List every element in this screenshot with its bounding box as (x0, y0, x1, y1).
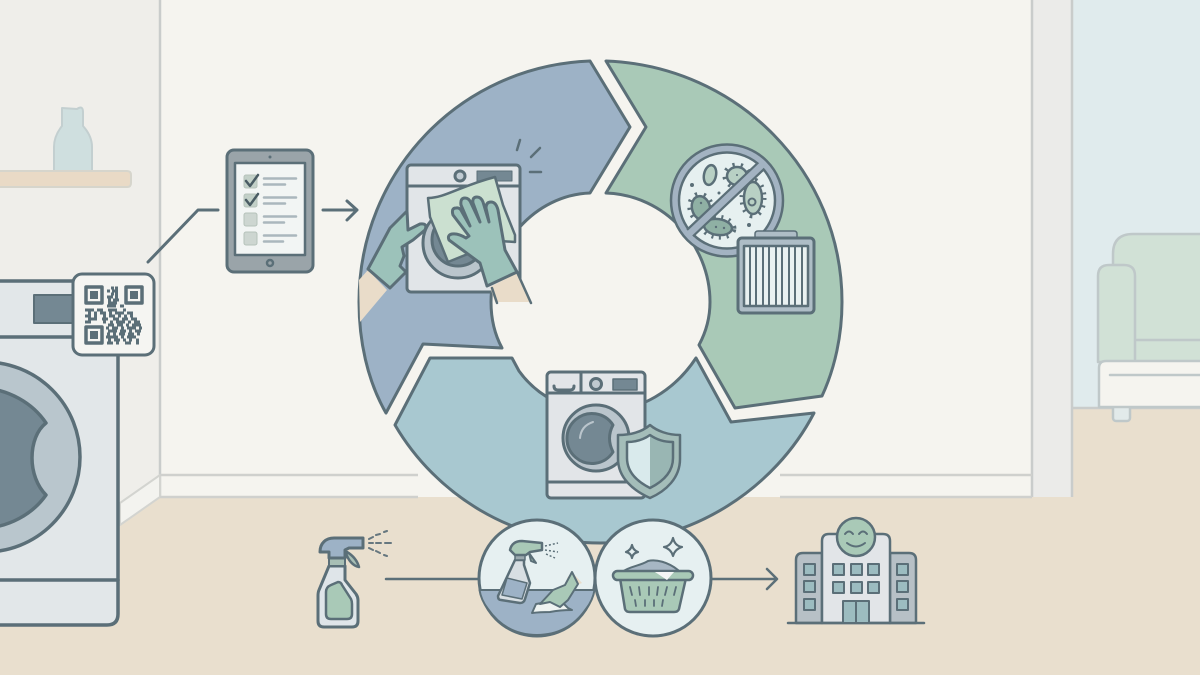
petri dish prohibition (671, 144, 783, 256)
washing machine with door (0, 281, 118, 625)
protected washer (547, 372, 645, 498)
mini spray bottle (498, 560, 530, 603)
tablet with checklist (227, 150, 313, 272)
left glove (368, 211, 426, 288)
sofa by the window (1098, 234, 1200, 421)
cloth under hand (532, 600, 572, 613)
arrow to hospital (711, 569, 777, 589)
cycle ring: segment blue, cleaning (359, 61, 630, 413)
tan left forearm (359, 270, 387, 322)
icon: spray bottle (318, 531, 391, 627)
circle: wiping surfaces (479, 520, 595, 636)
connector line from QR to tablet (148, 210, 218, 262)
bacteria spikes (689, 167, 762, 237)
gloved hand (540, 572, 578, 607)
arrow to cycle (323, 201, 357, 220)
bacteria bodies (689, 164, 762, 237)
icon: hospital building with smile (788, 518, 924, 623)
cycle ring: segment teal, protection (395, 358, 814, 543)
prohibition bar (690, 166, 761, 233)
cycle ring: segment green, filter (606, 61, 842, 408)
shelf with bottle (0, 108, 131, 187)
tan right forearm (490, 273, 531, 302)
shield (618, 425, 680, 498)
right glove (448, 197, 517, 286)
washer being wiped (407, 165, 520, 292)
sparkles (664, 538, 682, 556)
tan wrist (567, 572, 582, 585)
green cloth (428, 177, 515, 262)
line from spray to circle (386, 578, 478, 580)
circle: clean laundry (595, 520, 711, 636)
sparkle lines (517, 140, 541, 172)
filter (738, 231, 814, 313)
QR code tag (73, 274, 154, 355)
